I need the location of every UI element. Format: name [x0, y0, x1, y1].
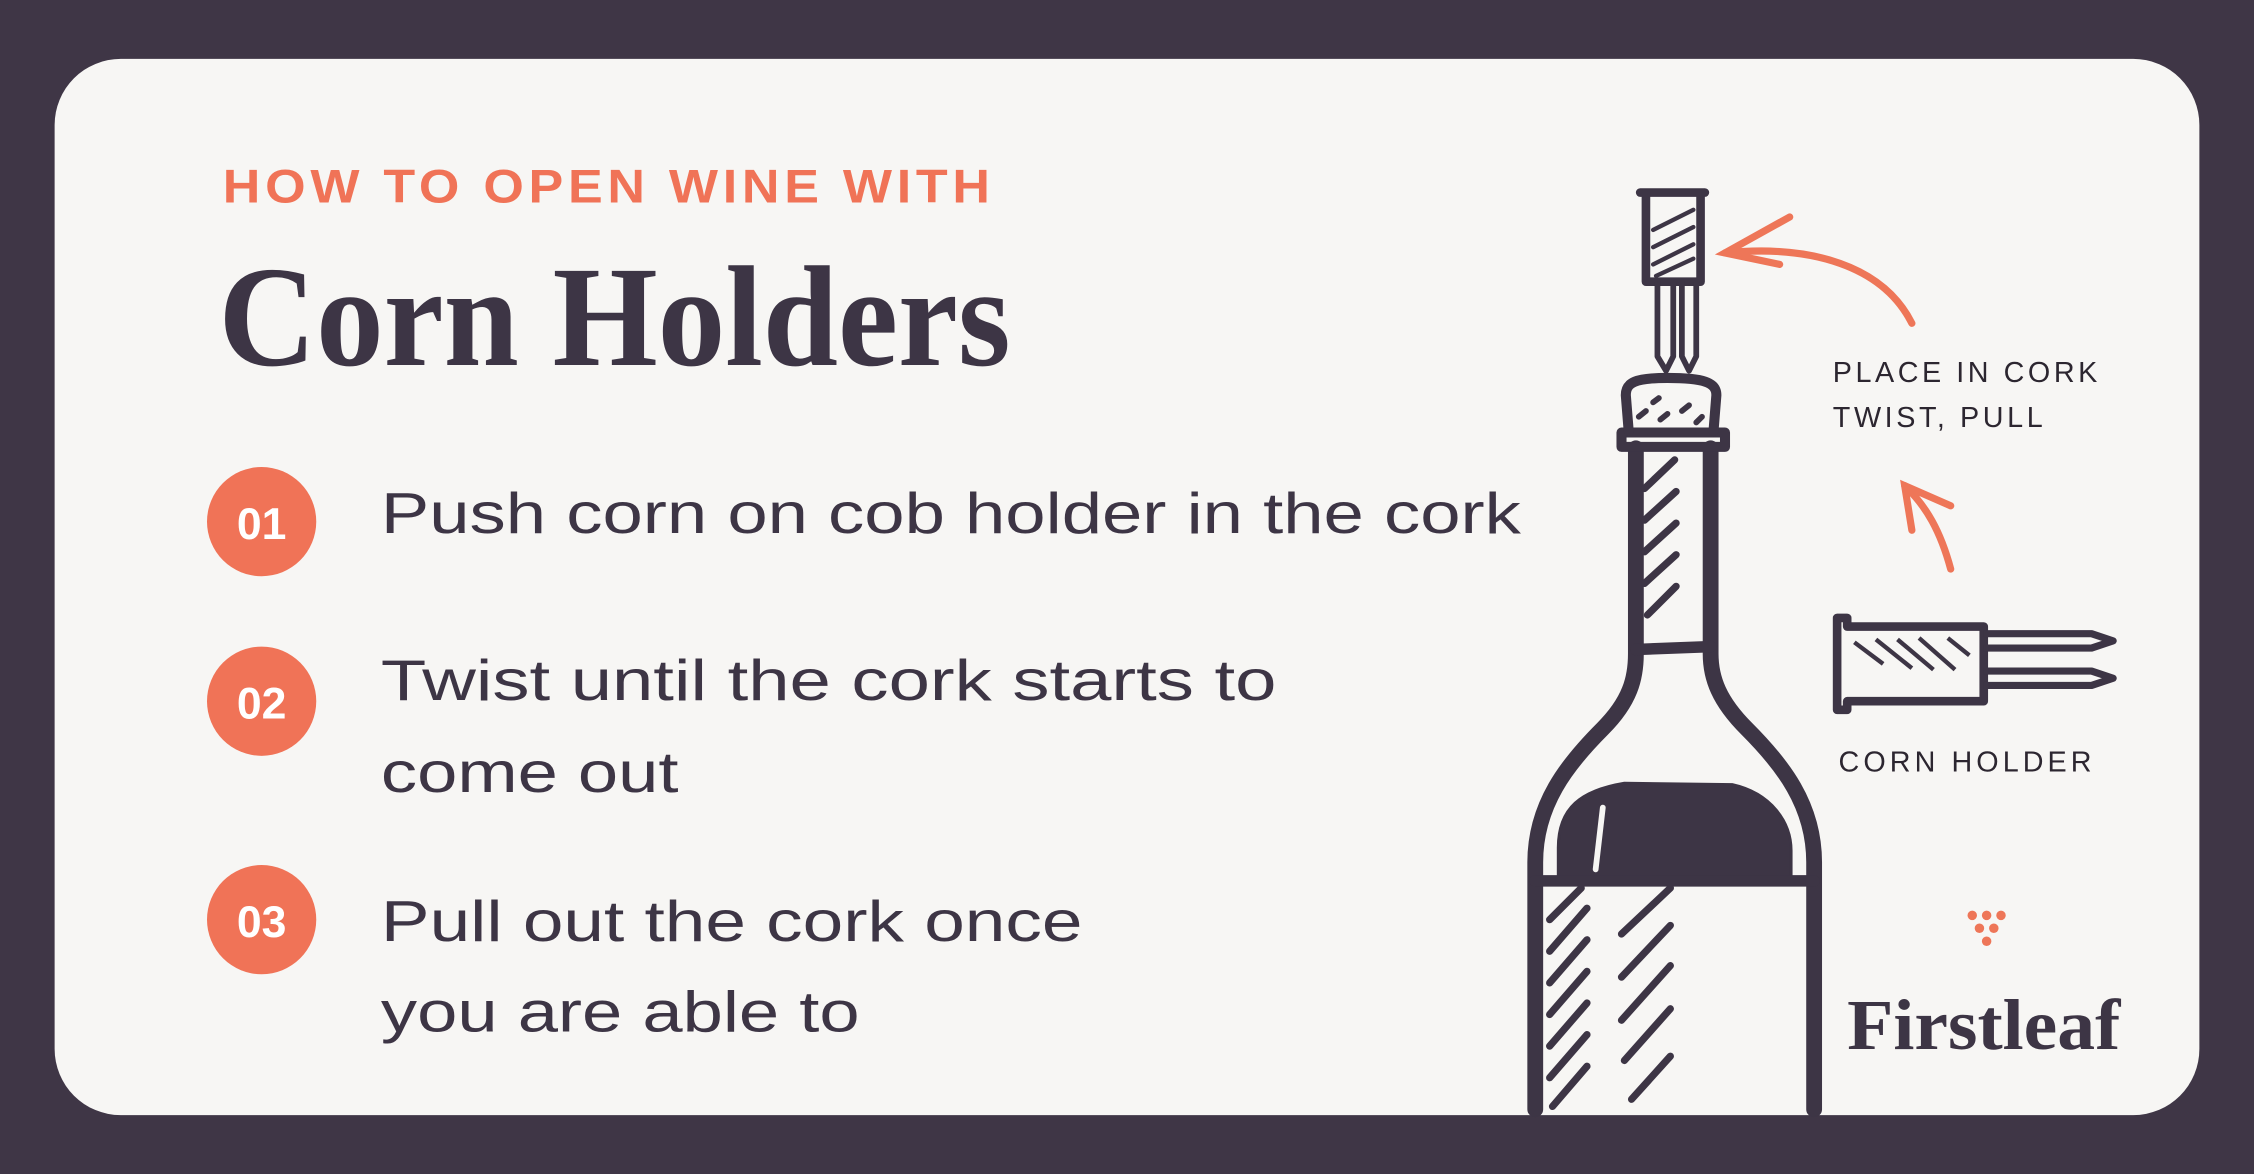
step 1 — [207, 467, 1521, 576]
icon: corn holder — [1837, 618, 2113, 710]
step 2: 02 — [237, 679, 286, 728]
arrow: to cork — [1725, 217, 1912, 323]
arrow: up — [1905, 486, 1951, 569]
step 1: Push corn on cob holder in the cork — [381, 482, 1521, 546]
step 3 — [207, 865, 1082, 1045]
logo: Firstleaf — [1847, 985, 2121, 1065]
logo — [1847, 911, 2121, 1065]
step 3: 03 — [237, 898, 286, 947]
step 3: Pull out the cork once — [381, 890, 1082, 954]
label: place in cork: PLACE IN CORK — [1833, 357, 2097, 389]
bottle illustration — [1535, 193, 1814, 1109]
step 2 — [207, 647, 1277, 805]
title: Corn Holders — [218, 238, 1011, 397]
label: place in cork: TWIST, PULL — [1833, 402, 2043, 434]
label: corn holder: CORN HOLDER — [1839, 747, 2092, 779]
step 1: 01 — [237, 500, 286, 549]
label: place in cork — [1833, 357, 2097, 434]
step 3: you are able to — [381, 981, 860, 1045]
subtitle: HOW TO OPEN WINE WITH — [223, 161, 995, 214]
step 2: come out — [381, 741, 679, 805]
step 2: Twist until the cork starts to — [381, 649, 1277, 713]
